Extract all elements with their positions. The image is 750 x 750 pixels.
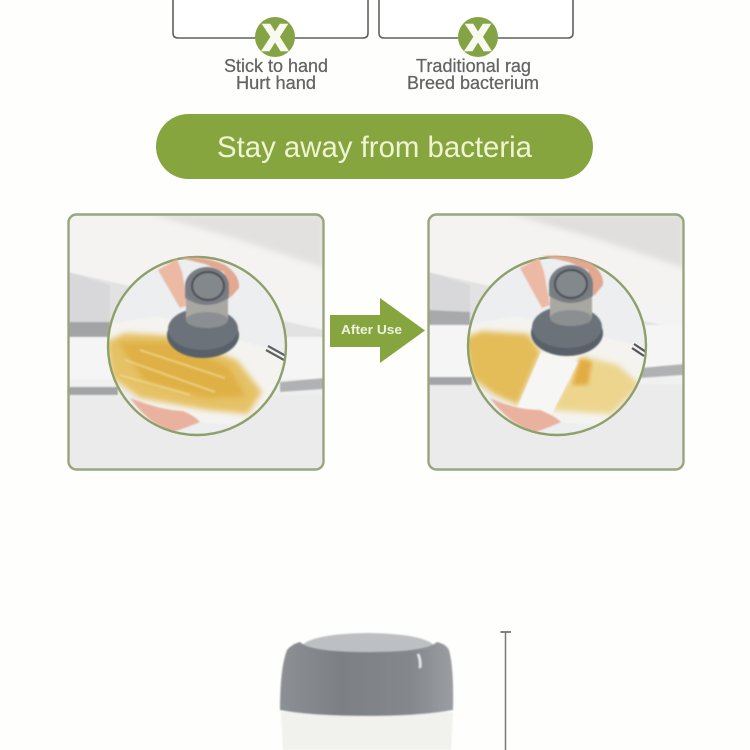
- clear body: [281, 712, 453, 750]
- icon: cross badge: [255, 17, 295, 58]
- grease stain right: [550, 356, 640, 414]
- caption: stick to hand: [224, 56, 328, 93]
- lower hand: [490, 398, 561, 432]
- heading pill: [156, 114, 593, 179]
- photo background: [68, 214, 324, 470]
- icon: cross badge: [458, 17, 498, 58]
- grease stain left: [464, 331, 541, 405]
- grey lid: [280, 642, 453, 716]
- icon: cross badge: X: [263, 17, 287, 58]
- circular inset scene: [464, 257, 652, 435]
- grease stain: [106, 333, 262, 414]
- panel: after use photo: [428, 214, 684, 470]
- caption: stick to hand: Hurt hand: [236, 73, 316, 93]
- circle outline: [468, 257, 646, 435]
- product: soap dispenser: [280, 633, 453, 750]
- lower hand: [130, 398, 200, 432]
- photo background: [428, 214, 684, 470]
- panel: stick to hand comparison: [173, 0, 368, 93]
- panel border: [68, 214, 324, 470]
- comparison box frame: [173, 0, 368, 38]
- panel: before use photo: [68, 214, 324, 470]
- heading pill: Stay away from bacteria: [217, 131, 532, 164]
- brush held by hand: [158, 258, 239, 358]
- caption: traditional rag: Traditional rag: [416, 56, 531, 76]
- circle outline: [108, 257, 286, 435]
- fork: [266, 346, 286, 360]
- panel border: [428, 214, 684, 470]
- circular inset scene: [104, 257, 292, 435]
- caption: traditional rag: Breed bacterium: [407, 73, 539, 93]
- plate: [484, 320, 640, 422]
- cleaned stripe: [517, 352, 578, 418]
- plate: [128, 322, 276, 382]
- brush held by hand: [520, 256, 603, 356]
- top button: [298, 633, 438, 652]
- caption: stick to hand: Stick to hand: [224, 56, 328, 76]
- dimension line: [500, 632, 511, 750]
- comparison box frame: [379, 0, 573, 38]
- arrow: after use: [330, 298, 425, 363]
- caption: traditional rag: [407, 56, 539, 93]
- panel: traditional rag comparison: [379, 0, 573, 93]
- arrow: after use: After Use: [341, 322, 402, 337]
- icon: cross badge: X: [466, 17, 490, 58]
- fork: [632, 344, 646, 356]
- lid highlight: [418, 654, 420, 668]
